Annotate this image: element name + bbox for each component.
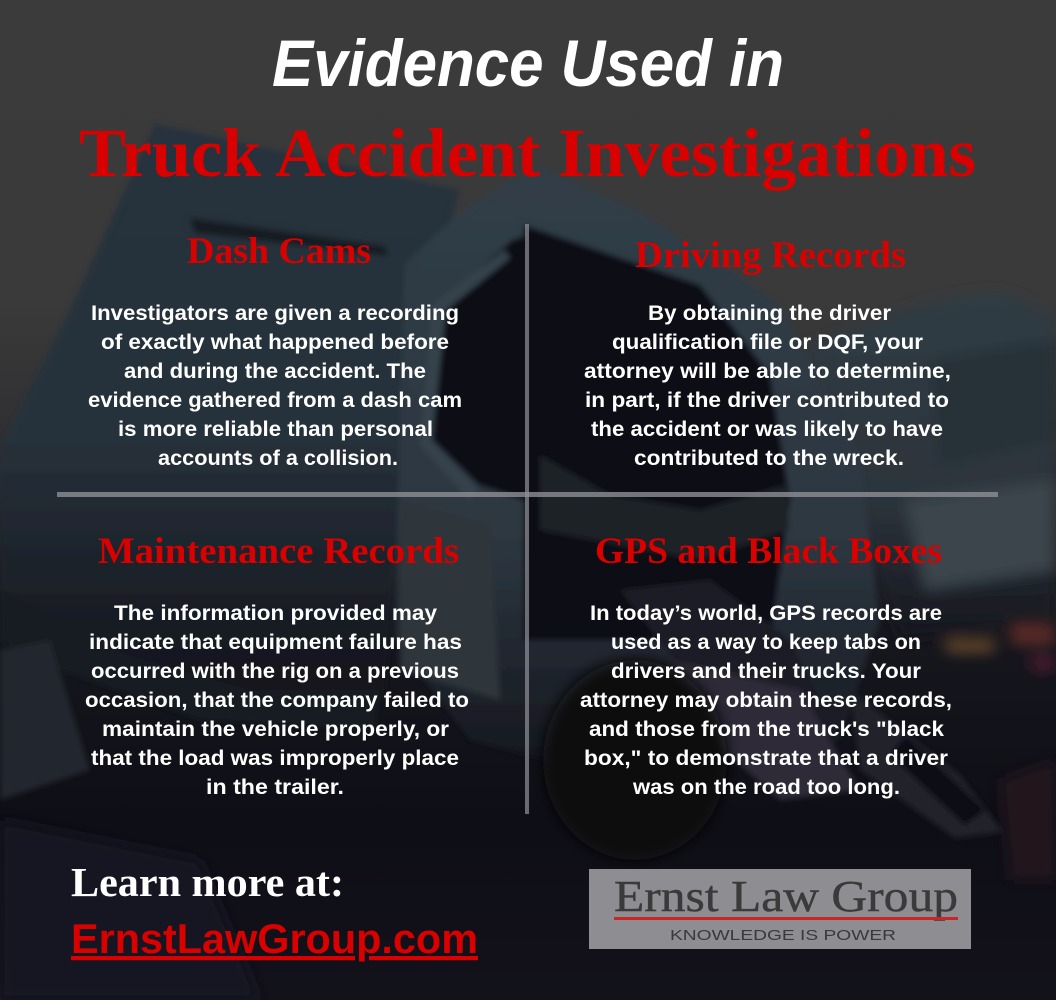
title line 1: Evidence Used in: [272, 26, 784, 100]
text block: gps and black boxes: and those from the truck's "black: [589, 717, 944, 741]
call to action: learn more: [71, 859, 478, 962]
text block: dash cams: accounts of a collision.: [158, 446, 398, 470]
text block: driving records: in part, if the driver contributed to: [585, 388, 949, 412]
panel: dash cams: [88, 231, 462, 470]
text block: gps and black boxes: attorney may obtain these records,: [580, 688, 952, 712]
text block: dash cams: Investigators are given a recording: [91, 301, 459, 325]
panel: maintenance records: [85, 531, 469, 799]
text block: maintenance records: [85, 601, 469, 799]
text block: dash cams: evidence gathered from a dash cam: [88, 388, 462, 412]
cab: [395, 168, 880, 780]
text block: gps and black boxes: was on the road too long.: [632, 775, 900, 799]
call to action: learn more: Learn more at:: [71, 859, 344, 905]
bumper steps: [850, 690, 1003, 838]
text block: driving records: attorney will be able to determine,: [584, 359, 951, 383]
text block: maintenance records: occasion, that the company failed to: [85, 688, 469, 712]
text block: maintenance records: The information provided may: [114, 601, 437, 625]
text block: dash cams: and during the accident. The: [124, 359, 426, 383]
text block: driving records: qualification file or DQF, your: [612, 330, 924, 354]
lower door: [400, 500, 500, 700]
heading: driving records: Driving Records: [635, 235, 906, 276]
heading: gps and black boxes: GPS and Black Boxes: [595, 531, 942, 572]
text block: maintenance records: in the trailer.: [206, 775, 344, 799]
trailer: [0, 124, 460, 700]
mirror frame and grille: [540, 455, 790, 560]
text block: maintenance records: that the load was improperly place: [91, 746, 459, 770]
text block: maintenance records: indicate that equipment failure has: [89, 630, 462, 654]
text block: gps and black boxes: drivers and their trucks. Your: [611, 659, 922, 683]
text block: driving records: [584, 301, 951, 470]
logo: Ernst Law Group: Ernst Law Group: [614, 872, 958, 921]
text block: driving records: contributed to the wreck.: [634, 446, 904, 470]
text block: driving records: By obtaining the driver: [648, 301, 892, 325]
text block: maintenance records: occurred with the rig on a previous: [91, 659, 459, 683]
panel: gps and black boxes: [580, 531, 952, 799]
heading: maintenance records: Maintenance Records: [98, 531, 459, 572]
text block: dash cams: is more reliable than personal: [118, 417, 433, 441]
side window: [432, 236, 524, 500]
logo: Ernst Law Group: [589, 869, 971, 949]
link: website: ErnstLawGroup.com: [71, 915, 478, 962]
title line 2: Truck Accident Investigations: [79, 115, 976, 191]
logo: Ernst Law Group: KNOWLEDGE IS POWER: [670, 927, 896, 944]
front wheel: [543, 660, 727, 860]
text block: gps and black boxes: In today’s world, GPS records are: [590, 601, 942, 625]
text block: gps and black boxes: used as a way to keep tabs on: [611, 630, 921, 654]
text block: driving records: the accident or was likely to have: [591, 417, 943, 441]
text block: gps and black boxes: [580, 601, 952, 799]
text block: maintenance records: maintain the vehicle properly, or: [102, 717, 450, 741]
divider: vertical: [525, 224, 529, 814]
windshield: [524, 225, 790, 640]
divider: horizontal: [57, 492, 998, 497]
heading: dash cams: Dash Cams: [187, 231, 371, 272]
text block: gps and black boxes: box," to demonstrate that a driver: [584, 746, 949, 770]
background vehicle, right: [800, 294, 1056, 640]
text block: dash cams: of exactly what happened before: [101, 330, 449, 354]
panel: driving records: [584, 235, 951, 470]
text block: dash cams: [88, 301, 462, 470]
